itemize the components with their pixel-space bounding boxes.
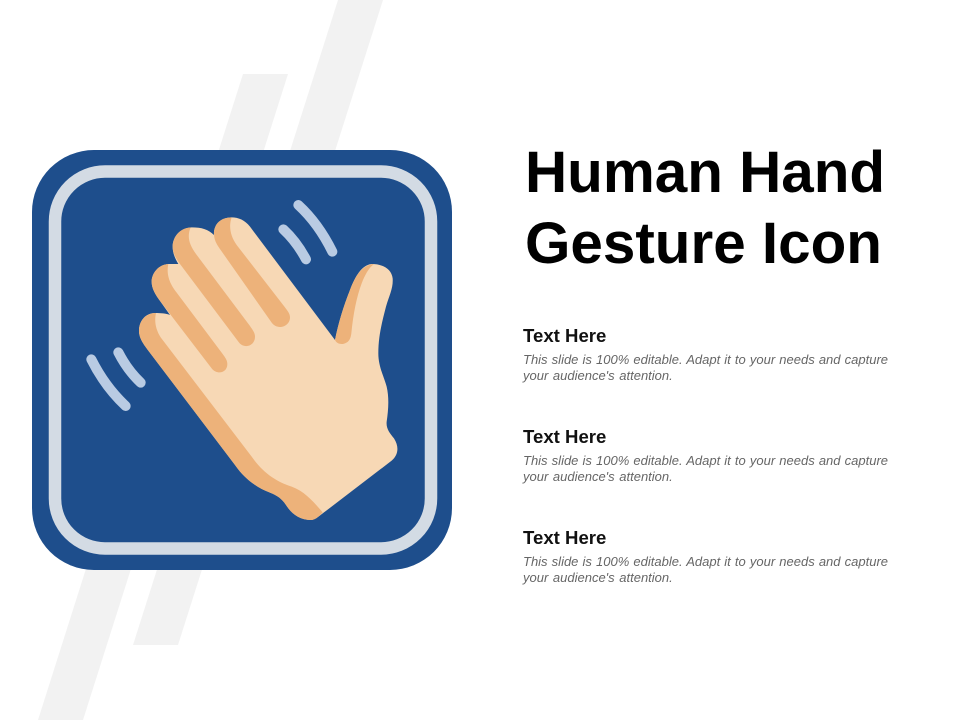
finger shadow three: [214, 217, 290, 327]
text block one: [522, 325, 888, 383]
text block three: [522, 527, 888, 585]
hand silhouette: [139, 217, 397, 520]
text block one: Text Here: [523, 325, 606, 346]
text block two: Text Here: [523, 426, 606, 447]
finger shadow one: [152, 264, 227, 372]
icon tile: [32, 150, 452, 570]
text block two: This slide is 100% editable. Adapt it to your needs and capture: [523, 452, 888, 468]
text block three: your audience's attention.: [523, 570, 673, 585]
background stripes: [38, 0, 383, 720]
palm edge shadow: [139, 313, 323, 520]
motion lines upper right: [283, 205, 332, 259]
thumb shadow: [335, 264, 374, 344]
motion lines lower left: [91, 352, 141, 406]
title: Gesture Icon: [525, 211, 882, 276]
text block three: Text Here: [523, 527, 606, 548]
finger shadow two: [173, 227, 255, 346]
title: [525, 140, 885, 276]
icon: waving hand: [91, 205, 397, 520]
text block one: your audience's attention.: [523, 368, 673, 383]
text block two: your audience's attention.: [523, 469, 673, 484]
text block three: This slide is 100% editable. Adapt it to your needs and capture: [523, 554, 888, 568]
text block two: [522, 426, 888, 484]
title: Human Hand: [525, 140, 885, 205]
text block one: This slide is 100% editable. Adapt it to your needs and capture: [523, 352, 888, 366]
icon tile inner ring: [55, 172, 431, 548]
